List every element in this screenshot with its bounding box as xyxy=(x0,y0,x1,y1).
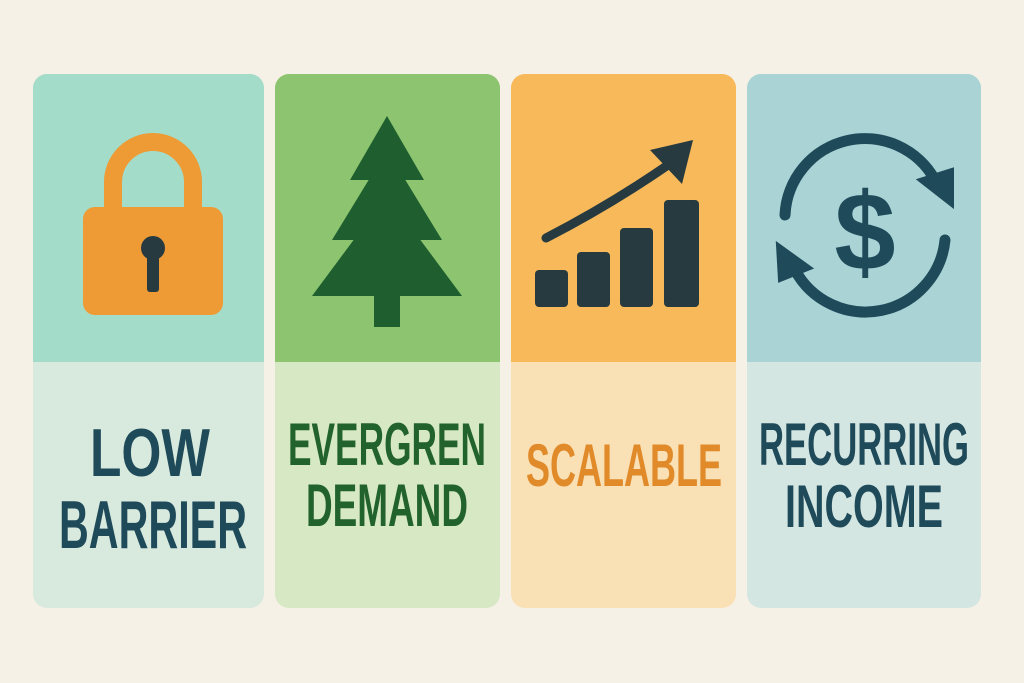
text: evergreen demand xyxy=(288,411,486,539)
panel: recurring income xyxy=(747,74,981,608)
text: evergreen demand: DEMAND xyxy=(306,472,468,539)
text: low barrier: LOW xyxy=(90,415,211,491)
text: recurring income xyxy=(759,411,969,540)
panel: scalable xyxy=(511,74,736,608)
icon: growth chart xyxy=(535,140,699,307)
icon: recurring dollar: $ xyxy=(834,171,896,294)
icon: recurring dollar xyxy=(778,139,952,312)
icon: padlock xyxy=(83,142,223,315)
panel: evergreen demand xyxy=(275,74,500,608)
text: recurring income: INCOME xyxy=(785,473,943,540)
icon: tree xyxy=(312,116,462,327)
text: evergreen demand: EVERGREN xyxy=(288,411,486,478)
text: low barrier: BARRIER xyxy=(59,487,247,563)
text: low barrier xyxy=(59,415,247,563)
text: scalable: SCALABLE xyxy=(526,432,722,499)
panel: low barrier xyxy=(33,74,264,608)
